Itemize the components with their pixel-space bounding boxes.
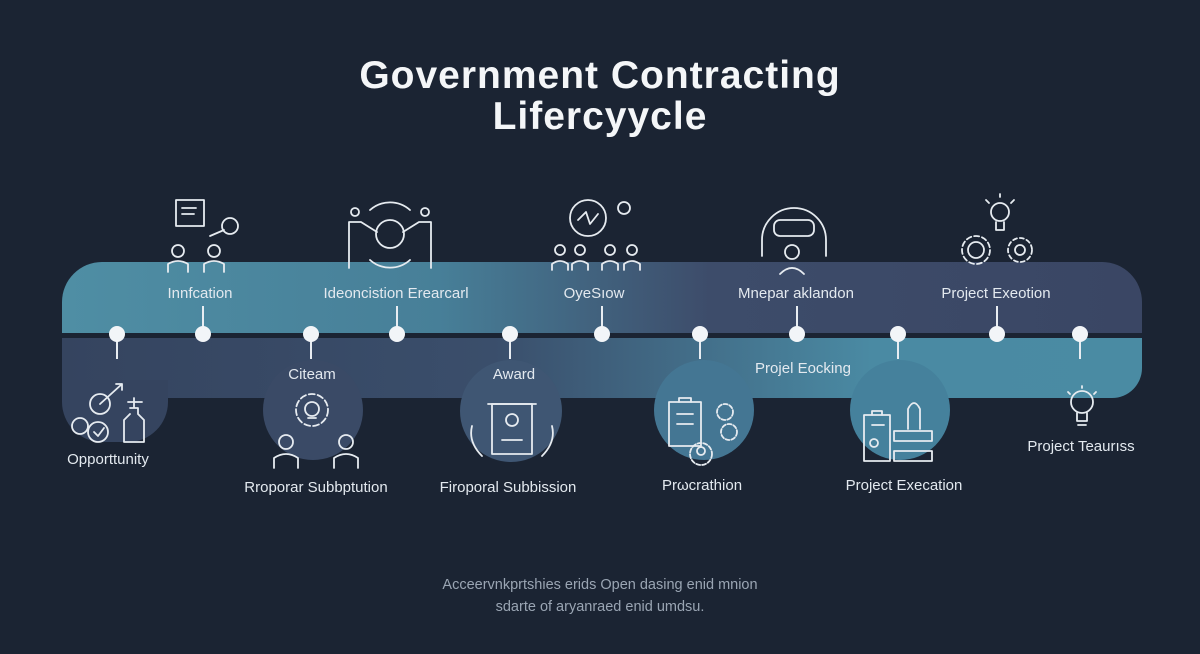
text: OyeSıow xyxy=(564,285,624,302)
text: Project Teaurıss xyxy=(1027,438,1135,455)
icon: award document hands xyxy=(470,403,554,457)
footer text xyxy=(442,577,758,615)
icon: team idea xyxy=(273,393,359,469)
upper band xyxy=(62,262,1142,333)
text: Firoporal Subbission xyxy=(440,479,576,496)
text: Prωcrathion xyxy=(662,477,742,494)
icon: gears and bulb xyxy=(961,193,1033,265)
icon: network people xyxy=(551,199,641,271)
text: Projel Eocking xyxy=(755,360,851,377)
icon: document and people xyxy=(167,199,239,273)
text: Ideoncistion Erearcarl xyxy=(323,285,469,302)
title: Government Contracting xyxy=(359,54,841,97)
icon: clipboard tools xyxy=(863,402,933,462)
icon: opportunity target xyxy=(71,383,145,443)
lower band xyxy=(62,338,1142,398)
icon: lightbulb xyxy=(1067,385,1097,426)
icon: handshake money xyxy=(348,202,432,269)
text: Opporttunity xyxy=(67,451,149,468)
footer text: sdarte of aryanraed enid umdsu. xyxy=(496,599,704,615)
lower labels: Citeam xyxy=(288,366,336,383)
text: Project Execation xyxy=(846,477,962,494)
upper labels: Innfcation xyxy=(167,285,233,302)
text: Rroporar Subbptution xyxy=(244,479,388,496)
icon: clipboard gears xyxy=(668,397,738,466)
text: Project Exeotion xyxy=(941,285,1051,302)
text: Mnepar aklandon xyxy=(738,285,854,302)
title xyxy=(359,54,841,138)
title: Lifercyycle xyxy=(493,95,707,138)
icon: thinking head xyxy=(761,207,827,275)
footer text: Acceervnkprtshies erids Open dasing enid mnion xyxy=(442,577,758,593)
text: Award xyxy=(493,366,535,383)
